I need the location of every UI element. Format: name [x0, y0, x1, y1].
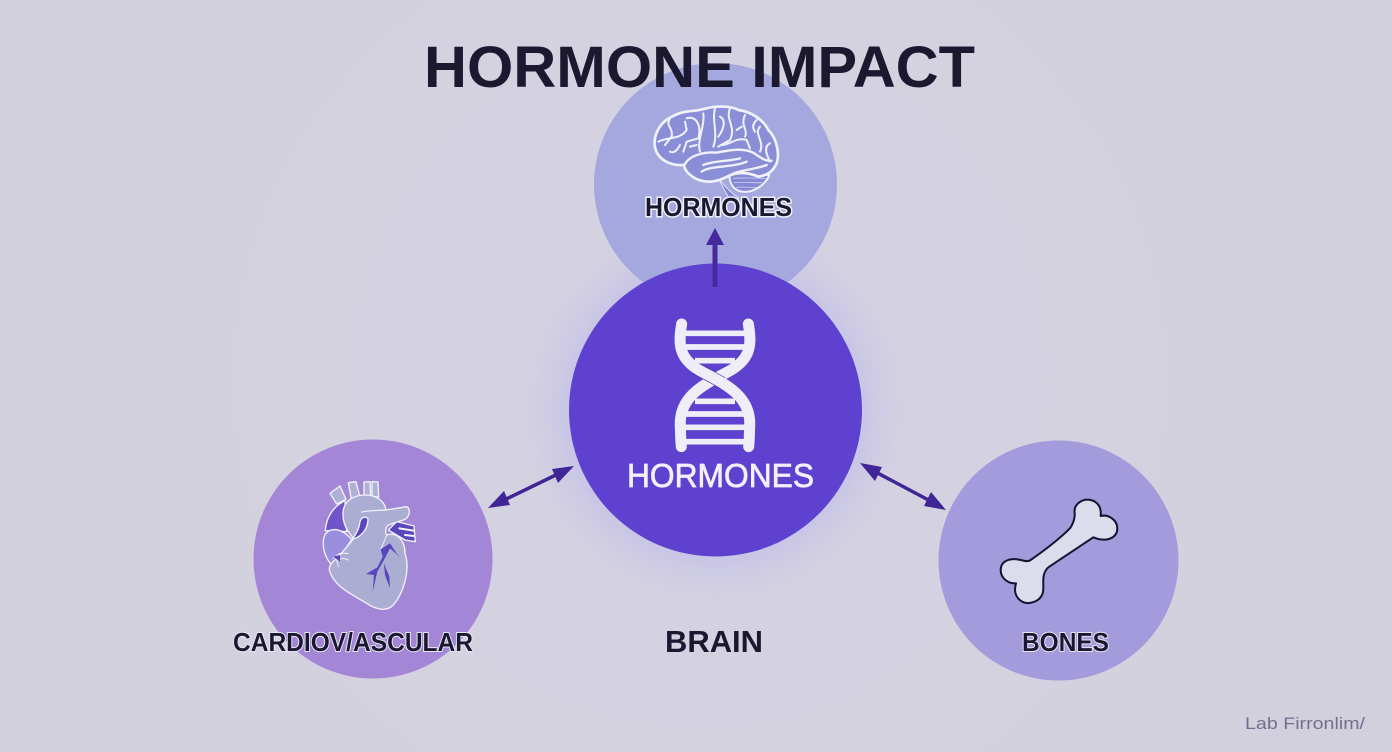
arrow: center to cardiovascular	[488, 466, 574, 508]
arrow: center to brain	[706, 228, 724, 287]
icon: bone	[1001, 500, 1117, 603]
label: cardiovascular: CARDIOV/ASCULAR	[233, 627, 473, 657]
circle: bones node	[938, 440, 1178, 680]
label: hormones (center): HORMONES	[627, 457, 814, 494]
arrow: center to bones	[860, 463, 946, 510]
icon: brain	[655, 107, 778, 200]
circle: central hormones node	[569, 264, 862, 556]
label: hormones (brain node): HORMONES	[645, 192, 792, 222]
watermark: Lab Firronlim/	[1245, 714, 1365, 733]
label: brain: BRAIN	[665, 624, 763, 659]
label: bones: BONES	[1022, 627, 1109, 657]
circle: brain node	[594, 63, 837, 306]
icon: heart	[323, 482, 415, 609]
circle: cardiovascular node	[233, 440, 492, 678]
icon: DNA helix	[680, 324, 750, 447]
title: HORMONE IMPACT	[424, 35, 975, 100]
